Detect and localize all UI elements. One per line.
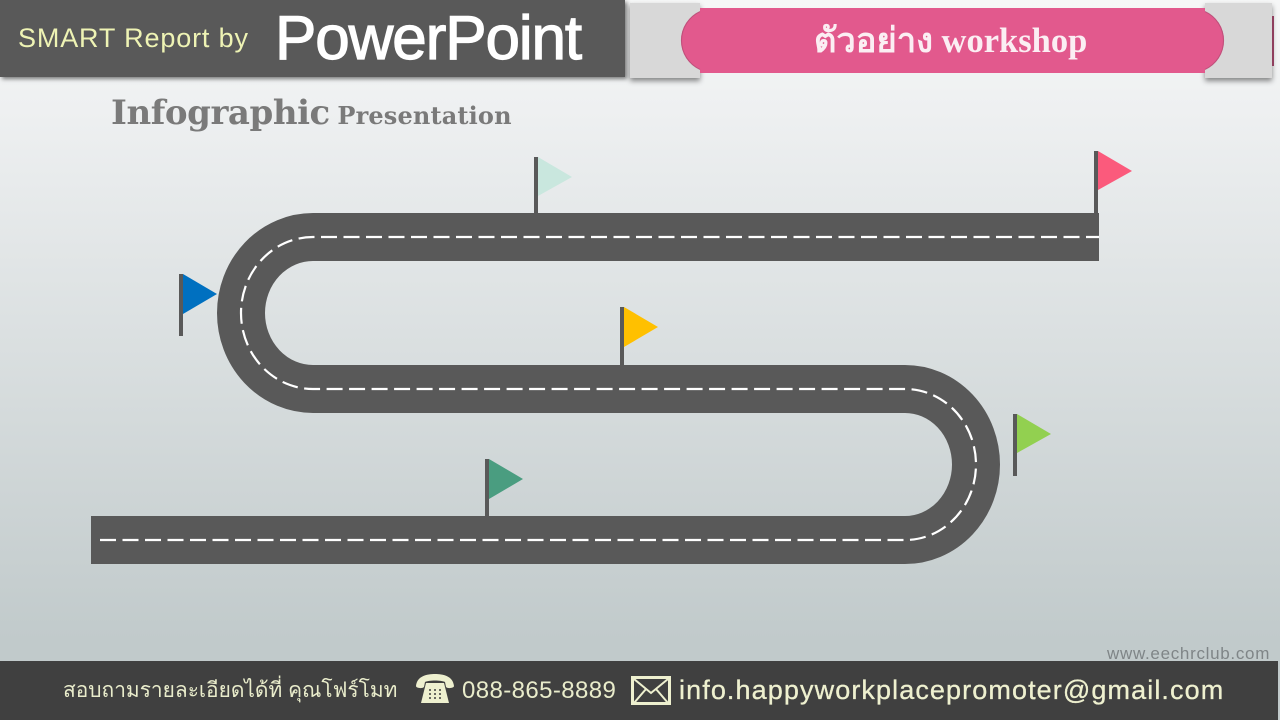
website credit: www.eechrclub.com [1107, 644, 1270, 663]
subtitle: Infographic Presentation: Infographic Presentation [111, 93, 512, 133]
icon: telephone [416, 674, 454, 703]
road centre dashes [100, 237, 1099, 540]
flag: green [1013, 414, 1051, 476]
banner left tab [630, 3, 700, 78]
road surface [91, 237, 1099, 540]
email address: info.happyworkplacepromoter@gmail.com [679, 675, 1224, 705]
flag: pale mint [534, 157, 572, 213]
footer contact text: สอบถามรายละเอียดได้ที่ คุณโฟร์โมท [63, 679, 397, 702]
header bar [0, 0, 630, 82]
banner pink pill [680, 8, 1274, 73]
flag: yellow [620, 307, 658, 365]
banner title: ตัวอย่าง workshop [814, 22, 1087, 60]
flag: pink [1094, 151, 1132, 213]
banner right tab [1205, 3, 1272, 78]
header title: PowerPoint: PowerPoint [275, 4, 581, 73]
header label: SMART Report by: SMART Report by [18, 23, 249, 53]
header dark panel [0, 0, 625, 77]
icon: envelope [631, 676, 671, 705]
flag: teal [485, 459, 523, 516]
phone number: 088-865-8889 [462, 677, 616, 704]
footer bar [0, 661, 1278, 720]
flag: blue [179, 274, 217, 336]
workshop banner [626, 2, 1276, 84]
